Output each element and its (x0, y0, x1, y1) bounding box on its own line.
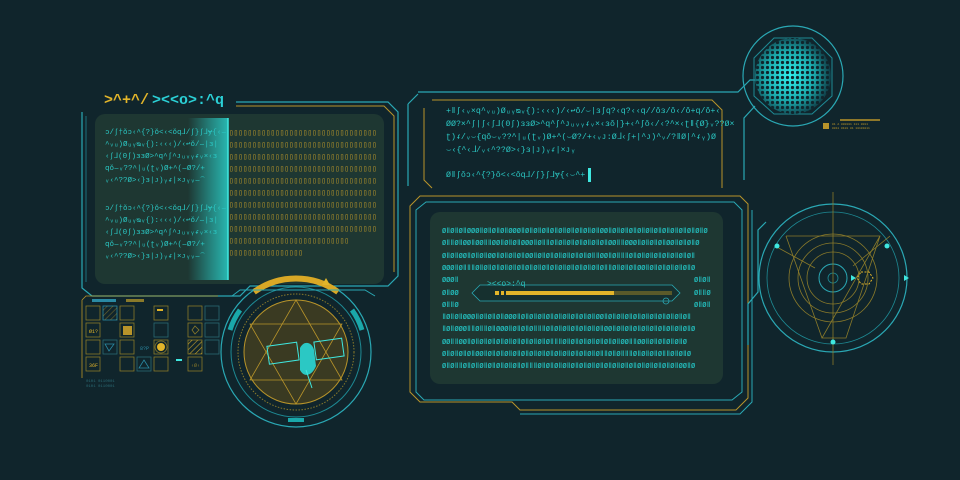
panel: bottom middle binary: ØǁØǁØǁØǁØØǁØǁØǁØǁØǁØǁØǁØǁØǁØǁØǁØǁØǁØǁØǁǁØǁØǁǁǁØǁØǁØǁØǁǁØǁØǁØ (442, 350, 692, 359)
yellow box glyph rows: ▯▯▯▯▯▯▯▯▯▯▯▯▯▯▯▯▯▯▯▯▯▯▯▯▯▯▯▯▯▯▯▯ (229, 225, 377, 234)
panel: bottom middle binary: ØǁǁØ (694, 289, 711, 298)
cyan glyph text: qǒ⌣ᵥ??^|ᵤ(ʈᵥ)Ø+^(⌣Ø?/+ (105, 164, 205, 173)
panel: bottom middle binary: ØØǁǁØØǁØǁØǁØǁØǁØǁØǁØǁØǁØǁØǁǁǁØǁØǁØǁØǁØǁØǁØǁØØǁǁØØǁØǁØǁØǁØǁØ (442, 338, 688, 347)
icon: satellite scope (221, 277, 371, 427)
yellow box glyph rows: ▯▯▯▯▯▯▯▯▯▯▯▯▯▯▯▯▯▯▯▯▯▯▯▯▯▯▯▯▯▯▯▯ (229, 201, 377, 210)
panel: top middle text (408, 80, 760, 188)
cyan glyph text: ᵥ‹^??Ø>‹}ɜ|ᴊ)ᵧᵳ|×ᴊᵧᵥ⌣⁀ (105, 252, 205, 261)
panel: bottom middle binary: ØǁØǁØØǁØǁØǁØØǁØǁØǁØǁØØǁØǁØǁØǁØǁØǁØǁØǁǁØØǁØǁǁǁØǁØǁØǁØǁØǁØǁØǁØǁ (442, 252, 695, 261)
panel: bottom middle binary: ØØØǁØǁǁǁØǁØǁØǁØǁØǁØǁØǁØǁØǁØǁØǁØǁØǁØǁØǁØǁǁØǁØǁØǁØØǁØǁØǁØǁØǁØǁØ (442, 264, 696, 273)
panel: bottom middle binary: ØǁØǁØǁØØØǁØǁØǁØǁØØØǁØǁØǁØǁØǁØǁØǁØǁØǁØǁØØǁØǁØǁØǁØǁØǁØǁØǁØǁØǁØǁØǁØ (442, 227, 708, 236)
panel: bottom middle binary: ØǁØǁǁØǁØǁØǁØǁØǁØǁØǁØǁǁǁØǁØǁØǁØǁØǁØǁØǁØǁØǁØǁØǁØǁØǁØǁØǁØǁØǁØØǁØ (442, 362, 696, 371)
cyan glyph text: ^ᵥᵤ)Øᵤᵧᴓᵥ{):‹‹‹)/‹↩ǒ/⌣|ɜ| (105, 216, 218, 225)
yellow box glyph rows: ▯▯▯▯▯▯▯▯▯▯▯▯▯▯▯▯▯▯▯▯▯▯▯▯▯▯▯▯▯▯▯▯ (229, 165, 377, 174)
yellow box glyph rows: ▯▯▯▯▯▯▯▯▯▯▯▯▯▯▯▯▯▯▯▯▯▯▯▯▯▯▯▯▯▯▯▯ (229, 141, 377, 150)
panel: left text panel (82, 102, 398, 296)
panel: top middle text: +ǁʃ‹ᵥ×q^ᵥᵤ)Øᵤᵧᴓᵥ{):‹‹‹)/‹↩ǒ/⌣|ɜʃq?‹q?‹‹q//ǒɜ/ǒ‹/ǒ+q/ǒ+‹ (446, 106, 720, 116)
panel: symbol grid: ‹Ø‹ (191, 362, 200, 369)
panel: symbol grid: 8?P (140, 346, 149, 352)
cyan glyph text: ‹ʃ⅃(0ʃ)ɜɜØ>^q^ʃ^ᴊᵤᵥᵧᵳᵥ×‹ɜ (105, 152, 217, 161)
cyan glyph text: ‹ʃ⅃(0ʃ)ɜɜØ>^q^ʃ^ᴊᵤᵥᵧᵳᵥ×‹ɜ (105, 228, 217, 237)
cyan glyph text: ↄ/ʃ†ǒↄ‹^{?}ǒ<‹<ǒq⅃/ʃ}ʃ⅃ɏ{‹⌣ (105, 204, 226, 213)
callout: sphere label: 0011 0101 01 10101011 (832, 127, 870, 130)
panel: bottom middle binary: ØǁǁØǁØØǁØØǁǁØØǁØǁØǁØØØǁØǁǁØǁØǁØǁØǁØǁØǁØǁØØǁǁØØØǁØǁØǁØǁØØǁØǁØǁØ (442, 239, 700, 248)
callout: sphere label: 01 A 000101 111 0011 (832, 123, 868, 126)
title: ><<o>:^q (152, 92, 224, 109)
yellow box glyph rows (229, 129, 377, 258)
panel: symbol grid: 36F (89, 363, 98, 369)
panel: symbol grid: Ø1? (89, 328, 98, 335)
panel: bottom middle binary: ØǁØǁ (694, 301, 711, 310)
panel: bottom middle binary: ØǁØØ (442, 289, 459, 298)
cyan glyph text: ᵥ‹^??Ø>‹}ɜ|ᴊ)ᵧᵳ|×ᴊᵧᵥ⌣⁀ (105, 176, 205, 185)
cyan glyph text: qǒ⌣ᵥ??^|ᵤ(ʈᵥ)Ø+^(⌣Ø?/+ (105, 240, 205, 249)
yellow box glyph rows: ▯▯▯▯▯▯▯▯▯▯▯▯▯▯▯▯▯▯▯▯▯▯▯▯▯▯▯▯▯▯▯▯ (229, 177, 377, 186)
panel: symbol grid (82, 296, 219, 389)
panel: bottom middle binary (410, 196, 752, 414)
panel: symbol grid: 0101 0110001 (86, 380, 115, 384)
panel: bottom middle binary: ØǁØǁ (694, 276, 711, 285)
progress bar (472, 280, 680, 304)
yellow box glyph rows: ▯▯▯▯▯▯▯▯▯▯▯▯▯▯▯▯▯▯▯▯▯▯▯▯▯▯▯▯▯▯▯▯ (229, 213, 377, 222)
title (104, 92, 224, 109)
cyan glyph text (105, 128, 226, 261)
panel: bottom middle binary: ǁØǁØØØǁǁØǁǁØǁØØØǁØǁØǁØǁǁǁØǁØǁØǁØǁØǁØǁØǁØØǁØǁØǁØǁØǁØǁØǁØǁØǁØǁØ (442, 325, 696, 334)
icon: halftone sphere (743, 26, 843, 180)
yellow box glyph rows: ▯▯▯▯▯▯▯▯▯▯▯▯▯▯▯▯▯▯▯▯▯▯▯▯▯▯▯▯▯▯▯▯ (229, 129, 377, 138)
callout: sphere label (823, 120, 880, 130)
yellow box glyph rows: ▯▯▯▯▯▯▯▯▯▯▯▯▯▯▯▯▯▯▯▯▯▯▯▯▯▯▯▯▯▯▯▯ (229, 153, 377, 162)
panel: bottom middle binary: ǁØǁØǁØØØǁØǁØǁØǁØØØǁØǁØǁØǁØǁØǁØǁØǁØǁØǁØØǁØǁØǁØǁØǁØǁØǁØǁØǁØǁØǁ (442, 313, 691, 322)
panel: top middle text: ʈ)ᵳ/ᵥ⌣{qǒ⌣ᵥ??^|ᵤ(ʈᵥ)Ø+^(⌣Ø?/+‹ᵥᴊ:Ø⅃‹ʃ+|^ᴊ)^ᵥ/?ǁØ|^ᵳᵧ)Ø (446, 132, 716, 142)
yellow box glyph rows: ▯▯▯▯▯▯▯▯▯▯▯▯▯▯▯▯ (229, 249, 303, 258)
panel: symbol grid: 0101 0110001 (86, 385, 115, 389)
panel: top middle text: ⌣‹{^‹⅃/ᵥ‹^??Ø>‹}ɜ|ᴊ)ᵧᵳ|×ᴊᵧ (446, 145, 576, 155)
yellow box glyph rows: ▯▯▯▯▯▯▯▯▯▯▯▯▯▯▯▯▯▯▯▯▯▯▯▯▯▯▯▯▯▯▯▯ (229, 189, 377, 198)
panel: top middle text: ØØ?×^ʃ|ʃ‹ʃ⅃(0ʃ)ɜɜØ>^q^ʃ^ᴊᵤᵥᵧᵳᵥ×‹ɜǒ|}+‹^ʃǒ‹/‹?^×‹ʈǁ{Ø}ᵥ??Ø× (446, 119, 734, 129)
panel: bottom middle binary: ØØØǁ (442, 276, 459, 285)
cyan glyph text: ↄ/ʃ†ǒↄ‹^{?}ǒ<‹<ǒq⅃/ʃ}ʃ⅃ɏ{‹⌣ (105, 128, 226, 137)
panel: bottom middle binary: ØǁǁØ (442, 301, 459, 310)
progress bar: ><<o>:^q (487, 280, 526, 289)
cyan glyph text: ^ᵥᵤ)Øᵤᵧᴓᵥ{):‹‹‹)/‹↩ǒ/⌣|ɜ| (105, 140, 218, 149)
title: >^+^/ (104, 92, 149, 109)
panel: top middle text: Øǁʃǒↄ‹^{?}ǒ<‹<ǒq⅃/ʃ}ʃ⅃ɏ{‹⌣^+ (446, 170, 585, 180)
yellow box glyph rows: ▯▯▯▯▯▯▯▯▯▯▯▯▯▯▯▯▯▯▯▯▯▯▯▯▯▯ (229, 237, 349, 246)
chart: radar target (748, 192, 909, 365)
